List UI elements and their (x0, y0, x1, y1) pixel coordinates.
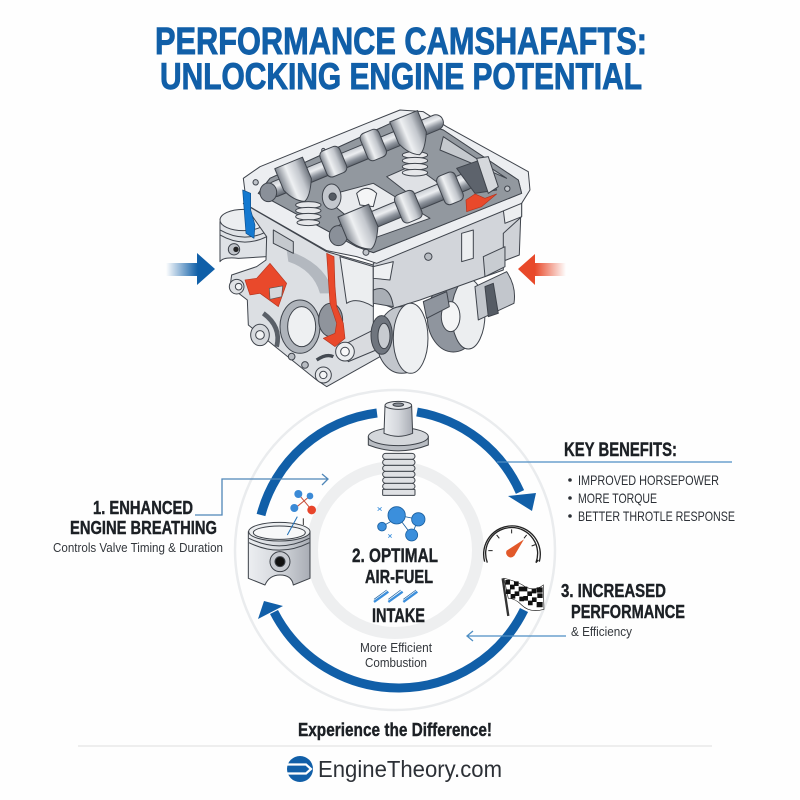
key benefits: KEY BENEFITS: (564, 440, 677, 461)
text: step 2: AIR-FUEL (365, 567, 433, 587)
key benefits: BETTER THROTLE RESPONSE (578, 508, 735, 524)
callout line: benefits (497, 461, 732, 463)
valve springs (296, 152, 428, 226)
key benefits: IMPROVED HORSEPOWER (578, 472, 719, 488)
block: left face (230, 203, 380, 387)
camshaft front (329, 157, 498, 256)
engine illustration (220, 110, 530, 387)
callout line: breathing (195, 474, 328, 515)
text: step 3: & Efficiency (571, 624, 632, 639)
molecule icon: center (378, 507, 425, 541)
deck frame (243, 110, 530, 263)
text: step 1 (53, 498, 223, 555)
logo icon (286, 756, 313, 782)
callout line: performance (467, 631, 566, 641)
red oil passages (245, 253, 345, 347)
text: step 2: INTAKE (372, 606, 425, 627)
text: step 1: ENGINE BREATHING (70, 518, 217, 538)
valve icon (368, 401, 428, 495)
gauge icon (484, 526, 540, 563)
text: step 3: PERFORMANCE (571, 602, 685, 622)
air flow arrows (374, 590, 417, 602)
arrow: blue intake (166, 253, 215, 285)
right piston (477, 218, 521, 265)
blue cycle arrows (261, 412, 524, 688)
inner grey ring (312, 467, 478, 633)
text: step 2: 2. OPTIMAL (352, 546, 438, 567)
title (155, 21, 647, 97)
left piston (220, 209, 267, 262)
arrow: red exhaust (518, 254, 566, 285)
divider (78, 745, 712, 747)
key benefits: MORE TORQUE (578, 490, 657, 506)
block: right face (373, 202, 522, 308)
bolts (253, 148, 510, 255)
text: step 2: More Efficient (360, 640, 432, 655)
text: step 3 (561, 581, 685, 639)
text: step 2 (352, 546, 438, 670)
text: step 1: 1. ENHANCED (93, 498, 193, 518)
molecule icon: piston (290, 490, 316, 514)
bearing bore (229, 279, 343, 383)
logo text: EngineTheory.com (318, 756, 502, 782)
outer thin ring (235, 390, 555, 710)
spring (383, 453, 415, 495)
camshaft rear (260, 111, 446, 207)
key benefits (564, 440, 735, 524)
piston icon (248, 517, 310, 585)
checkered flag icon (503, 578, 544, 616)
text: step 3: 3. INCREASED (561, 581, 666, 601)
title: PERFORMANCE CAMSHAFAFTS: (155, 21, 647, 63)
blue coolant channel (243, 190, 255, 238)
valve well (258, 118, 522, 253)
crankshaft and front flywheel (336, 292, 449, 373)
text: step 1: Controls Valve Timing & Duration (53, 540, 223, 555)
title: UNLOCKING ENGINE POTENTIAL (160, 56, 642, 97)
right rear flywheel (427, 272, 515, 352)
tagline: Experience the Difference! (298, 720, 492, 740)
text: step 2: Combustion (365, 655, 427, 670)
